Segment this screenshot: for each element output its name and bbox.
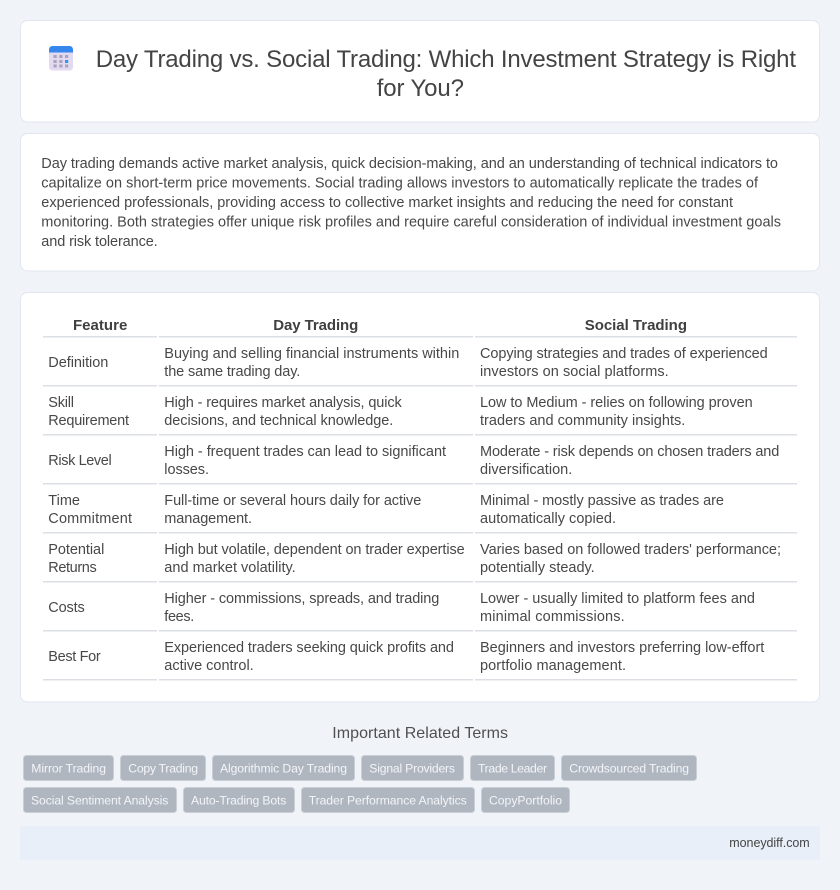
row: best for: Experienced traders seeking quick profits and	[164, 640, 454, 656]
row: best for	[48, 640, 764, 674]
row: time commitment: automatically copied.	[480, 511, 616, 527]
table header row: Social Trading	[585, 317, 687, 334]
row: costs: Costs	[48, 600, 85, 616]
tag: auto-trading bots	[184, 788, 294, 812]
row: time commitment: Commitment	[48, 511, 132, 527]
row: definition: Definition	[48, 355, 108, 371]
row: skill requirement: High - requires market analysis, quick	[164, 395, 402, 411]
panel: comparison table	[20, 292, 820, 702]
tag: copy trading	[120, 756, 206, 780]
row: risk level: diversification.	[480, 462, 572, 478]
title	[96, 46, 796, 102]
table header row: Feature	[73, 317, 127, 334]
tag: signal providers	[362, 756, 464, 780]
row: skill requirement: Skill	[48, 395, 74, 411]
intro text: monitoring. Both strategies offer unique risk profiles and require careful consideration of individual investment goals	[41, 214, 781, 230]
tag: social sentiment analysis	[24, 788, 176, 812]
row: skill requirement: Low to Medium - relies on following proven	[480, 395, 753, 411]
title: for You?	[377, 75, 464, 102]
intro text: experienced professionals, providing access to collective market insights and reducing the need for constant	[41, 195, 733, 211]
row: potential returns: High but volatile, dependent on trader expertise	[164, 542, 465, 558]
row: potential returns	[48, 542, 781, 576]
tag: trade leader: Trade Leader	[478, 761, 547, 775]
row: risk level: losses.	[164, 462, 209, 478]
intro text: Day trading demands active market analysis, quick decision-making, and an understanding of technical indicators to	[41, 156, 778, 172]
row: best for: Best For	[48, 649, 101, 665]
tag: trade leader	[470, 756, 554, 780]
tag: mirror trading	[24, 756, 114, 780]
row: time commitment: Full-time or several hours daily for active	[164, 493, 421, 509]
tag: copy trading: Copy Trading	[128, 761, 198, 775]
icon: calendar	[49, 46, 73, 70]
related term tags	[24, 756, 696, 812]
row: costs: fees.	[164, 609, 194, 625]
row: definition: investors on social platforms.	[480, 364, 669, 380]
panel: introduction	[20, 134, 820, 271]
tag: copyportfolio: CopyPortfolio	[489, 793, 562, 807]
row: definition	[48, 346, 768, 380]
table header row	[73, 317, 687, 334]
tag: copyportfolio	[482, 788, 570, 812]
row: costs: Lower - usually limited to platform fees and	[480, 591, 755, 607]
footer: moneydiff.com	[729, 836, 810, 850]
row: risk level: Moderate - risk depends on chosen traders and	[480, 444, 779, 460]
row: definition: Copying strategies and trades of experienced	[480, 346, 768, 362]
title: Day Trading vs. Social Trading: Which Investment Strategy is Right	[96, 46, 796, 73]
table header row: Day Trading	[273, 317, 358, 334]
footer	[20, 826, 820, 860]
intro text: and risk tolerance.	[41, 234, 158, 250]
row: skill requirement: decisions, and technical knowledge.	[164, 413, 393, 429]
row: costs: minimal commissions.	[480, 609, 625, 625]
row: best for: Beginners and investors preferring low-effort	[480, 640, 764, 656]
tag: trader performance analytics	[302, 788, 474, 812]
row: time commitment: Minimal - mostly passive as trades are	[480, 493, 724, 509]
tag: signal providers: Signal Providers	[369, 761, 455, 775]
tag: auto-trading bots: Auto-Trading Bots	[191, 793, 286, 807]
row: definition: Buying and selling financial instruments within	[164, 346, 459, 362]
tag: trader performance analytics: Trader Performance Analytics	[309, 793, 467, 807]
row: potential returns: Varies based on followed traders' performance;	[480, 542, 781, 558]
row: risk level: Risk Level	[48, 453, 112, 469]
row: skill requirement	[48, 395, 753, 429]
row: best for: portfolio management.	[480, 658, 626, 674]
tag: mirror trading: Mirror Trading	[31, 761, 106, 775]
tag: algorithmic day trading	[212, 756, 354, 780]
row: definition: the same trading day.	[164, 364, 300, 380]
row: best for: active control.	[164, 658, 254, 674]
header panel	[20, 20, 820, 122]
row: time commitment: Time	[48, 493, 80, 509]
tag: crowdsourced trading	[562, 756, 696, 780]
row: potential returns: and market volatility.	[164, 560, 296, 576]
row: skill requirement: Requirement	[48, 413, 129, 429]
intro text	[41, 156, 781, 250]
row: costs	[48, 591, 755, 625]
row: potential returns: potentially steady.	[480, 560, 595, 576]
row: time commitment	[48, 493, 724, 527]
row: skill requirement: traders and community insights.	[480, 413, 685, 429]
row: time commitment: management.	[164, 511, 252, 527]
row: risk level	[48, 444, 779, 478]
row: potential returns: Returns	[48, 560, 97, 576]
row: potential returns: Potential	[48, 542, 104, 558]
heading: important related terms: Important Related Terms	[332, 725, 508, 742]
tag: algorithmic day trading: Algorithmic Day Trading	[220, 761, 347, 775]
row: costs: Higher - commissions, spreads, and trading	[164, 591, 439, 607]
tag: crowdsourced trading: Crowdsourced Trading	[569, 761, 689, 775]
row: risk level: High - frequent trades can lead to significant	[164, 444, 446, 460]
intro text: capitalize on short-term price movements. Social trading allows investors to automatically replicate the trades of	[41, 176, 759, 192]
tag: social sentiment analysis: Social Sentiment Analysis	[31, 793, 168, 807]
